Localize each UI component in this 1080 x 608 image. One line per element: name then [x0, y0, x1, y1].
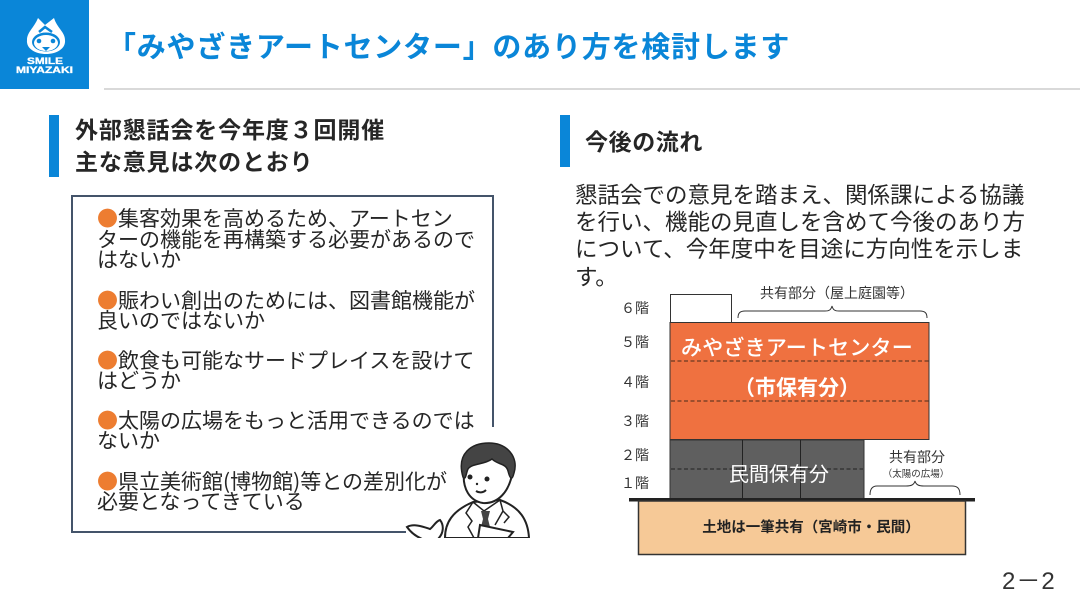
orange city-owned block — [670, 322, 929, 440]
page number: 2－2 — [1002, 568, 1056, 595]
left heading: 外部懇話会を今年度３回開催 — [75, 117, 385, 143]
icon: presenter illustration — [406, 442, 530, 538]
right text block: す。 — [575, 265, 618, 290]
top brace label — [738, 285, 927, 318]
right text block — [575, 183, 1025, 290]
logo: MIYAZAKI — [16, 65, 73, 75]
land block — [638, 501, 966, 554]
opinion 5 — [97, 466, 447, 516]
ground line — [629, 498, 975, 502]
opinion 3 — [97, 345, 474, 395]
bottom brace label: 共有部分 — [889, 449, 945, 465]
floor labels — [621, 300, 649, 491]
opinion 1: はないか — [97, 244, 181, 274]
bottom brace label — [870, 449, 960, 495]
opinion 2 — [97, 285, 475, 335]
opinion 3: ●飲食も可能なサードプレイスを設けて — [97, 345, 474, 375]
orange city-owned block: みやざきアートセンター — [681, 336, 913, 360]
opinion 2: 良いのではないか — [97, 305, 265, 335]
floor labels: ２階 — [621, 447, 649, 463]
opinion 4: ●太陽の広場をもっと活用できるのでは — [97, 405, 475, 435]
floor labels: ３階 — [621, 413, 649, 429]
opinion 1 — [97, 203, 475, 274]
logo — [0, 0, 89, 89]
header rule — [104, 88, 1080, 90]
sixth floor box — [670, 294, 732, 322]
opinion 2: ●賑わい創出のためには、図書館機能が — [97, 285, 475, 315]
left heading — [75, 117, 385, 174]
grey private block: 民間保有分 — [729, 463, 829, 486]
bottom brace label: （太陽の広場） — [883, 468, 949, 480]
floor labels: ４階 — [621, 374, 649, 390]
opinion 4: ないか — [97, 425, 160, 455]
grey private block — [670, 440, 864, 499]
floor labels: ６階 — [621, 300, 649, 316]
opinion 1: ターの機能を再構築する必要があるので — [97, 224, 475, 254]
right heading: 今後の流れ — [585, 129, 703, 155]
right text block: について、今年度中を目途に方向性を示しま — [575, 237, 1023, 262]
opinion 1: ●集客効果を高めるため、アートセン — [97, 203, 453, 233]
floor labels: １階 — [621, 475, 649, 491]
left heading: 主な意見は次のとおり — [75, 148, 314, 174]
opinion 5: ●県立美術館(博物館)等との差別化が — [97, 466, 447, 496]
left accent bar — [49, 115, 59, 177]
building diagram — [621, 285, 975, 556]
logo: SMILE — [27, 56, 63, 66]
right text block: 懇話会での意見を踏まえ、関係課による協議 — [575, 183, 1024, 208]
right accent bar — [560, 115, 570, 167]
floor labels: ５階 — [621, 334, 649, 350]
right text block: を行い、機能の見直しを含めて今後のあり方 — [575, 210, 1025, 235]
land block: 土地は一筆共有（宮崎市・民間） — [702, 518, 920, 536]
opinion 5: 必要となってきている — [97, 486, 305, 516]
orange city-owned block: （市保有分） — [734, 377, 860, 400]
opinion 3: はどうか — [97, 365, 181, 395]
panel: opinions — [71, 195, 494, 533]
opinion 4 — [97, 405, 475, 455]
top brace label: 共有部分（屋上庭園等） — [760, 285, 914, 301]
title: 「みやざきアートセンター」のあり方を検討します — [107, 32, 790, 64]
